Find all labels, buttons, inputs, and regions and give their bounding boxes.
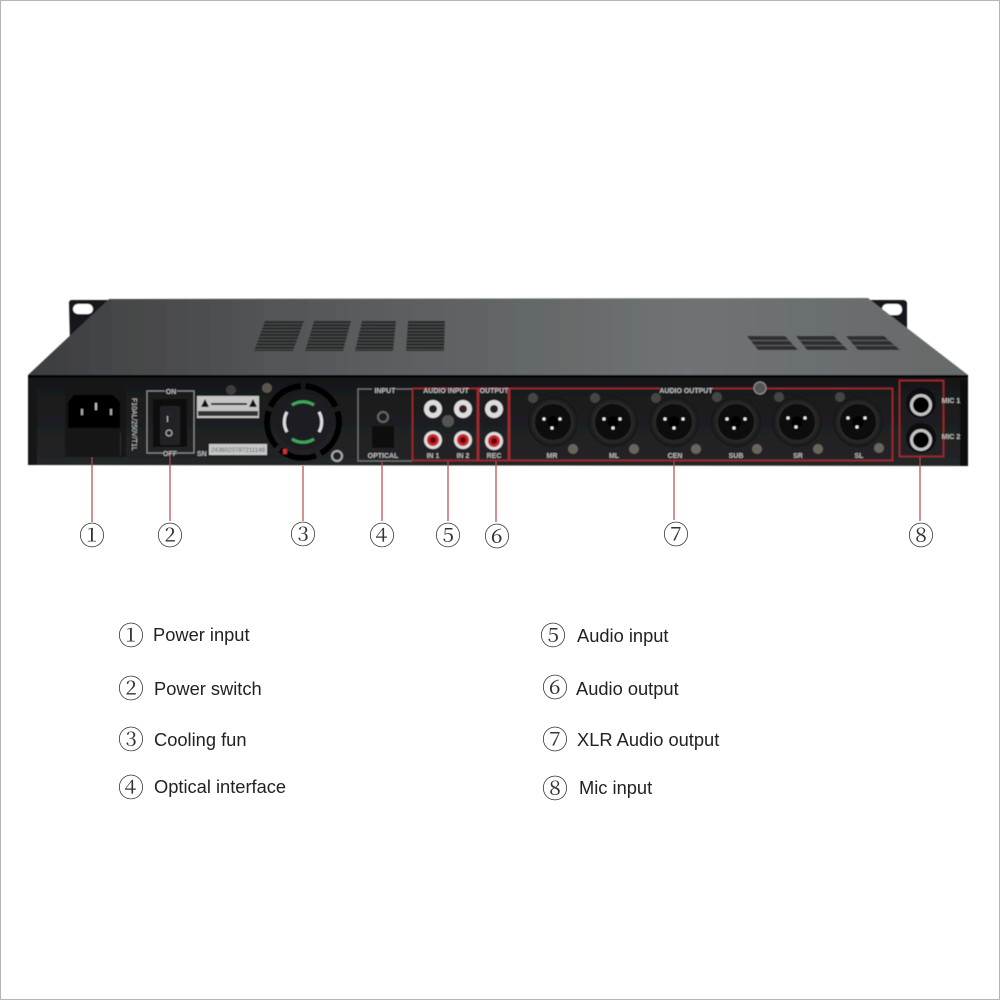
XLR: SUB: SUB (729, 453, 743, 460)
legend: right column: Audio output (576, 678, 679, 699)
rack ear: right (866, 300, 907, 340)
legend: right column: ⑦ (542, 720, 568, 757)
legend: left column: Power input (153, 624, 250, 645)
serial number label: SN (197, 451, 207, 458)
callout numbers: ⑤ (435, 516, 461, 553)
callout numbers: ① (79, 516, 105, 553)
callout numbers: ⑧ (908, 516, 934, 553)
leader lines (92, 456, 920, 522)
XLR: ML: ML (609, 453, 620, 460)
audio output RCA jacks: REC (487, 453, 501, 460)
legend: left column: Optical interface (154, 776, 286, 797)
screws: upper panel (226, 383, 342, 461)
legend: right column: XLR Audio output (577, 729, 719, 750)
audio input RCA jacks: IN 1 (427, 453, 440, 460)
vents: right group (747, 336, 900, 350)
XLR: SR: SR (793, 453, 803, 460)
power switch: OFF (163, 451, 178, 458)
front panel (28, 375, 968, 466)
callout numbers: ⑦ (663, 515, 689, 552)
legend: right column: ⑧ (542, 769, 568, 806)
XLR: CEN: CEN (668, 453, 682, 460)
XLR audio outputs: AUDIO OUTPUT (659, 388, 713, 395)
legend: right column: Mic input (579, 777, 652, 798)
XLR: SUB (711, 392, 762, 460)
legend: left column (118, 616, 286, 805)
XLR: CEN (649, 393, 701, 460)
legend: right column: Audio input (577, 625, 668, 646)
legend: left column: ② (118, 669, 144, 706)
mic inputs (900, 380, 960, 456)
XLR: SL (833, 392, 884, 460)
rack ear: left (69, 300, 112, 342)
optical input: INPUT (374, 388, 396, 395)
XLR audio outputs (510, 382, 892, 460)
power switch (147, 389, 194, 458)
callout numbers: ③ (290, 515, 316, 552)
serial number label (197, 444, 267, 458)
vents: left group (254, 321, 445, 351)
legend: right column: ⑤ (540, 616, 566, 653)
legend: left column: Power switch (154, 678, 262, 699)
legend: left column: ① (118, 616, 144, 653)
legend: left column: ③ (118, 720, 144, 757)
top cover (28, 298, 968, 375)
power input socket (65, 386, 137, 457)
power switch: ON (166, 389, 176, 396)
legend: right column (540, 616, 719, 806)
mic inputs: MIC 1 (942, 398, 960, 405)
serial number label: 2436020787211148 (211, 448, 266, 454)
callout numbers: ④ (369, 516, 395, 553)
cooling fan (267, 386, 339, 458)
warning label (197, 396, 259, 418)
callout numbers (79, 515, 934, 554)
callout numbers: ② (157, 516, 183, 553)
mic inputs: MIC 2 (942, 434, 960, 441)
legend: right column: ⑥ (542, 668, 568, 705)
optical input (358, 388, 412, 461)
optical input: OPTICAL (368, 453, 399, 460)
callout numbers: ⑥ (484, 517, 510, 554)
device: rear panel amplifier (28, 298, 968, 466)
XLR: MR: MR (547, 453, 557, 460)
audio input RCA jacks (412, 388, 478, 460)
audio output RCA jacks: OUTPUT (480, 388, 509, 395)
audio input RCA jacks: AUDIO INPUT (423, 388, 469, 395)
XLR: SL: SL (855, 453, 864, 460)
legend: left column: Cooling fun (154, 729, 246, 750)
voltage label: F10AL/250V/T1L (130, 398, 137, 451)
XLR: MR (528, 393, 578, 460)
XLR: ML (588, 393, 639, 460)
XLR: SR (772, 392, 823, 460)
audio output RCA jacks (478, 388, 509, 460)
legend: left column: ④ (118, 768, 144, 805)
audio input RCA jacks: IN 2 (457, 453, 470, 460)
